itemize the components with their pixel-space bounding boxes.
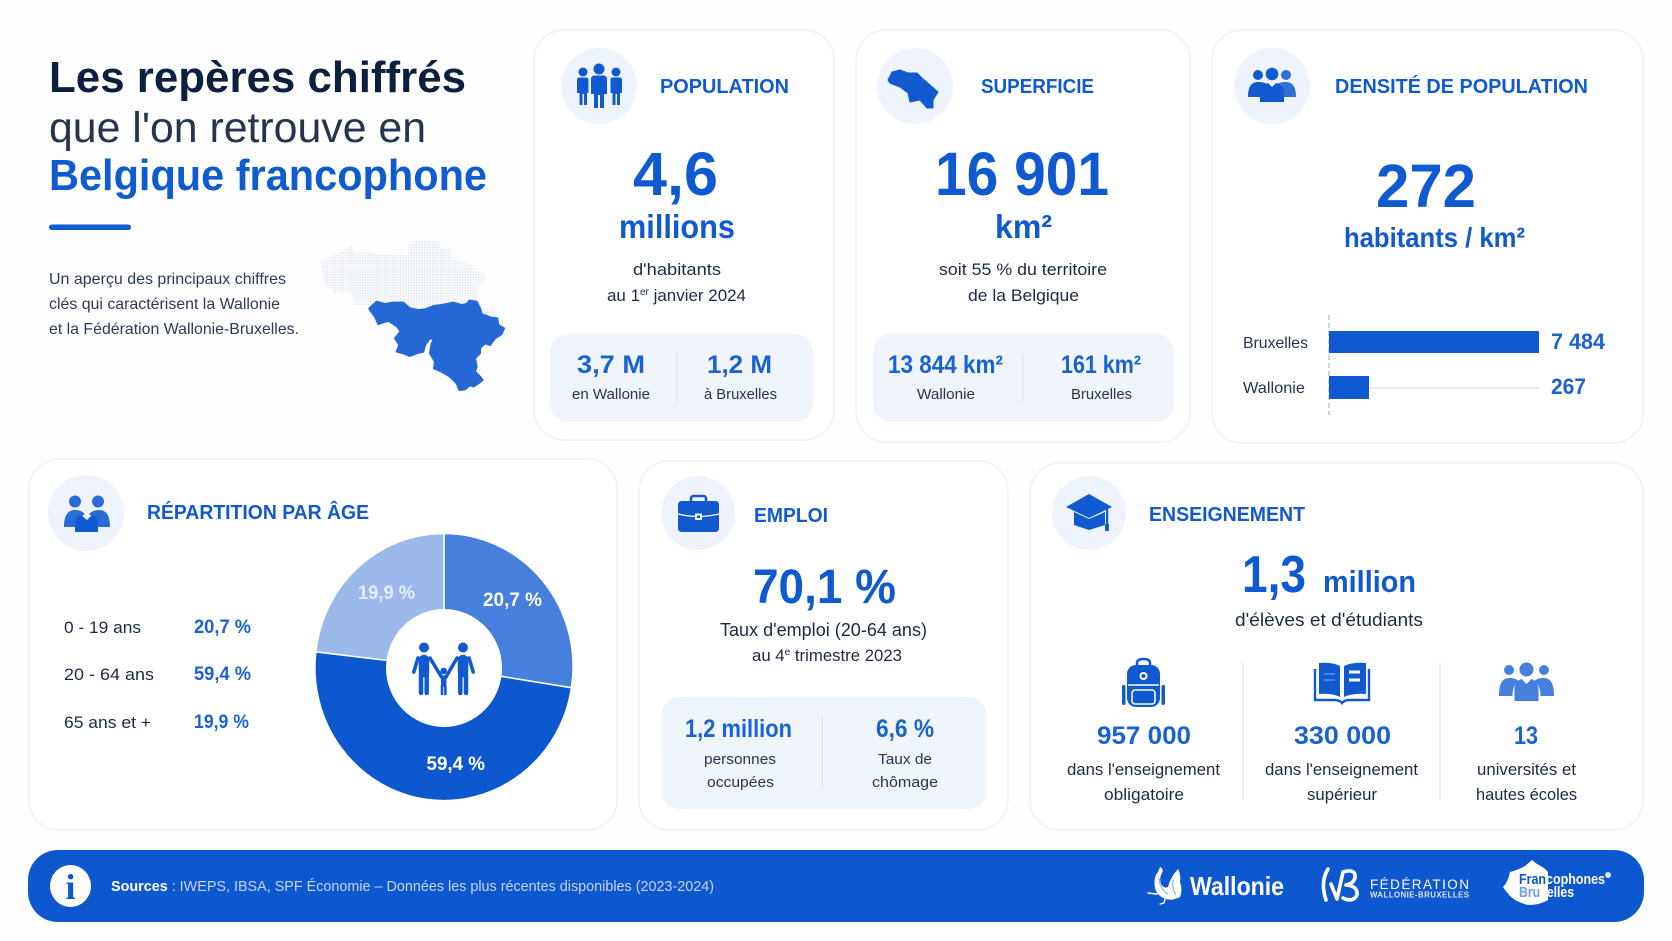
icon: family xyxy=(414,642,473,694)
column: universités et hautes écoles xyxy=(1476,662,1577,804)
intro text: Un aperçu des principaux chiffres xyxy=(49,271,286,288)
donut chart: 19,9 % xyxy=(358,583,415,604)
description: au 4 xyxy=(752,647,784,665)
description xyxy=(939,260,1107,305)
breakdown: 13 844 km² xyxy=(888,351,1003,379)
legend: 20 - 64 ans xyxy=(64,665,154,684)
key figure xyxy=(1344,152,1525,253)
key figure: 4,6 xyxy=(633,140,718,208)
key figure xyxy=(1242,546,1416,604)
column: enseignement supérieur: 330 000 xyxy=(1294,722,1391,750)
description: au 1 xyxy=(607,286,640,305)
panel: enseignement xyxy=(1030,463,1643,830)
donut chart xyxy=(315,534,573,801)
heading: SUPERFICIE xyxy=(981,76,1094,98)
key figure: habitants / km² xyxy=(1344,222,1525,253)
description xyxy=(607,260,746,305)
description: soit 55 % du territoire xyxy=(939,260,1107,279)
icon: three people xyxy=(561,48,637,124)
key figure: 272 xyxy=(1376,152,1476,220)
icon: group xyxy=(1234,48,1310,124)
legend xyxy=(64,617,251,733)
key figure: 70,1 % xyxy=(753,561,896,614)
column: enseignement obligatoire: obligatoire xyxy=(1104,785,1184,804)
icon: info xyxy=(50,865,91,907)
heading: POPULATION xyxy=(660,76,789,98)
breakdown xyxy=(661,697,987,809)
breakdown: 3,7 M xyxy=(577,351,645,379)
icon: graduation cap xyxy=(1052,476,1126,550)
bar chart: Wallonie xyxy=(1243,380,1305,397)
panel: population xyxy=(534,30,834,440)
logo: Fédération Wallonie-Bruxelles xyxy=(1323,869,1469,900)
legend: 0 - 19 ans xyxy=(64,618,141,637)
description: e xyxy=(785,647,791,658)
breakdown xyxy=(873,334,1174,422)
heading: DENSITÉ DE POPULATION xyxy=(1335,75,1588,98)
logo: Francophones Bruxelles xyxy=(1503,860,1611,905)
key figure: 1,3 xyxy=(1242,546,1306,604)
key figure: millions xyxy=(619,208,735,245)
description: de la Belgique xyxy=(968,286,1079,305)
title: Les repères chiffrés xyxy=(49,53,466,102)
icon: backpack xyxy=(1122,659,1165,707)
panel: superficie xyxy=(856,30,1190,442)
key figure xyxy=(935,140,1109,245)
description: trimestre 2023 xyxy=(790,647,902,665)
sources: Sources : IWEPS, IBSA, SPF Économie – Données les plus récentes disponibles (2023-2024) xyxy=(111,878,714,895)
column: enseignement supérieur xyxy=(1265,663,1418,804)
breakdown xyxy=(550,334,813,422)
breakdown: 1,2 million xyxy=(685,715,792,743)
breakdown: chômage xyxy=(872,774,938,791)
panel: répartition par âge xyxy=(29,459,617,830)
intro text: clés qui caractérisent la Wallonie xyxy=(49,296,280,313)
logo: Francophones Bruxelles: Bruxelles xyxy=(1519,884,1574,901)
bar chart: Bruxelles xyxy=(1243,335,1308,352)
column: universités et hautes écoles: universités et xyxy=(1477,760,1576,779)
key figure xyxy=(619,140,735,245)
breakdown: à Bruxelles xyxy=(704,386,777,403)
heading: ENSEIGNEMENT xyxy=(1149,504,1305,526)
bar chart: 7 484 xyxy=(1551,329,1606,354)
key figure: km² xyxy=(995,208,1052,245)
heading: RÉPARTITION PAR ÂGE xyxy=(147,500,369,524)
key figure: 16 901 xyxy=(935,140,1109,208)
icon: Belgium xyxy=(877,48,953,124)
panel: emploi xyxy=(639,461,1008,830)
panel: densité de population xyxy=(1212,30,1643,443)
description: er xyxy=(640,287,650,298)
description: janvier 2024 xyxy=(649,286,746,305)
icon: open book xyxy=(1315,663,1369,703)
description xyxy=(720,620,927,665)
icon: group xyxy=(1499,662,1554,701)
title: Belgique francophone xyxy=(49,151,487,200)
intro text: et la Fédération Wallonie-Bruxelles. xyxy=(49,321,299,338)
column: enseignement obligatoire: 957 000 xyxy=(1097,722,1191,750)
breakdown: Taux de xyxy=(878,751,932,768)
breakdown: Bruxelles xyxy=(1071,386,1132,403)
icon: two people xyxy=(48,475,124,551)
key figure: million xyxy=(1323,564,1416,599)
column: enseignement obligatoire: dans l'enseignement xyxy=(1067,760,1220,779)
breakdown: en Wallonie xyxy=(572,386,650,403)
legend: 59,4 % xyxy=(194,664,251,685)
column: universités et hautes écoles: hautes écoles xyxy=(1476,785,1577,804)
column: universités et hautes écoles: 13 xyxy=(1514,722,1538,750)
breakdown: personnes xyxy=(704,751,776,768)
icon: info: i xyxy=(65,867,76,907)
logo: Francophones Bruxelles: Francophones xyxy=(1519,871,1605,888)
breakdown: 1,2 M xyxy=(707,351,772,379)
footer band xyxy=(28,850,1644,922)
legend: 19,9 % xyxy=(194,712,249,733)
logo: Wallonie: Wallonie xyxy=(1190,871,1284,901)
column: enseignement supérieur: supérieur xyxy=(1307,785,1377,804)
map of Belgium with Wallonia highlighted xyxy=(321,240,504,390)
description: Taux d'emploi (20-64 ans) xyxy=(720,620,927,640)
bar chart: 267 xyxy=(1551,374,1586,399)
column: enseignement supérieur: dans l'enseignement xyxy=(1265,760,1418,779)
bar chart xyxy=(1243,315,1606,415)
description: d'habitants xyxy=(633,260,721,279)
logo: Wallonie xyxy=(1148,867,1284,904)
heading: EMPLOI xyxy=(754,505,828,527)
breakdown: occupées xyxy=(707,774,774,791)
donut chart: 20,7 % xyxy=(483,590,542,611)
description: d'élèves et d'étudiants xyxy=(1235,610,1423,630)
logo: Fédération Wallonie-Bruxelles: WALLONIE-BRUXELLES xyxy=(1370,890,1469,900)
intro text xyxy=(49,271,299,338)
title: que l'on retrouve en xyxy=(49,104,426,152)
breakdown: 161 km² xyxy=(1061,351,1141,379)
logo: Fédération Wallonie-Bruxelles: FÉDÉRATION xyxy=(1370,877,1469,892)
legend: 20,7 % xyxy=(194,617,251,638)
breakdown: 6,6 % xyxy=(876,715,934,743)
column: enseignement obligatoire xyxy=(1067,659,1220,804)
donut chart: 59,4 % xyxy=(426,754,485,775)
title xyxy=(49,53,487,200)
legend: 65 ans et + xyxy=(64,713,151,732)
icon: briefcase xyxy=(661,476,735,550)
breakdown: Wallonie xyxy=(917,386,975,403)
